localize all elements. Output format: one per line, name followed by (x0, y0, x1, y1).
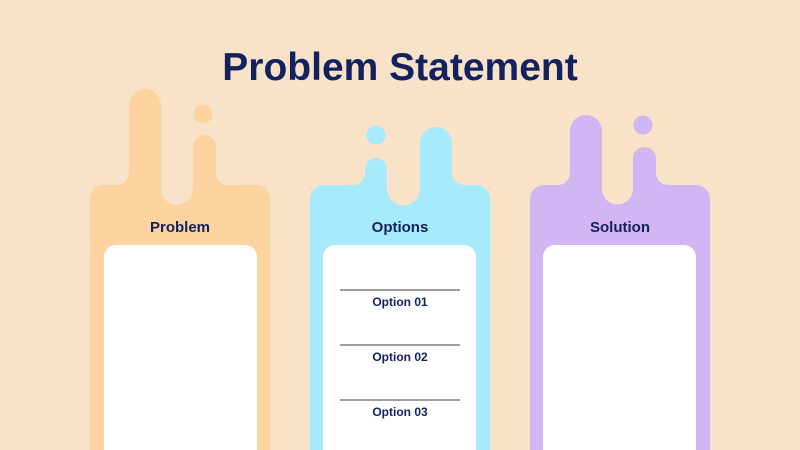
heading: solution: Solution (590, 219, 650, 236)
option 01: Option 01 (372, 295, 428, 309)
option 02: Option 02 (372, 350, 428, 364)
option 03: Option 03 (372, 405, 428, 419)
card: problem (104, 245, 257, 450)
card: options (323, 245, 476, 450)
card: solution (543, 245, 696, 450)
panel: options (310, 126, 490, 450)
title: Problem Statement (222, 46, 578, 89)
panel: solution (530, 115, 710, 450)
panel: problem (90, 89, 270, 450)
heading: problem: Problem (150, 219, 210, 236)
heading: options: Options (372, 219, 428, 236)
